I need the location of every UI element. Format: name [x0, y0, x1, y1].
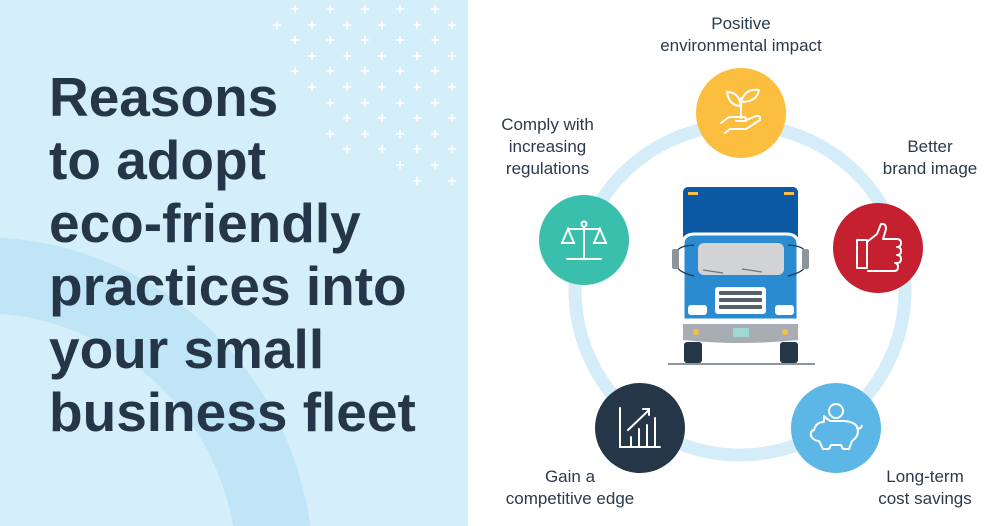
- label: cost savings: [878, 467, 972, 508]
- label: comply with regulations: Comply with: [501, 115, 594, 134]
- label: competitive edge: competitive edge: [506, 489, 634, 508]
- label: positive environmental impact: Positive: [711, 14, 771, 33]
- title: your small: [49, 318, 324, 380]
- label: comply with regulations: [501, 115, 594, 178]
- label: positive environmental impact: environmental impact: [660, 36, 822, 55]
- title: [49, 66, 416, 443]
- label: better brand image: [883, 137, 977, 178]
- label: positive environmental impact: [660, 14, 822, 55]
- label: competitive edge: [506, 467, 634, 508]
- title: business fleet: [49, 381, 416, 443]
- label: cost savings: Long-term: [886, 467, 964, 486]
- title: Reasons: [49, 66, 278, 128]
- truck: [668, 187, 815, 365]
- title: to adopt: [49, 129, 266, 191]
- icon: piggy bank (light blue): [791, 383, 881, 473]
- icon: plant in hand (yellow): [696, 68, 786, 158]
- title: eco-friendly: [49, 192, 361, 254]
- title: practices into: [49, 255, 407, 317]
- label: better brand image: brand image: [883, 159, 977, 178]
- icon: thumbs up (red): [833, 203, 923, 293]
- label: cost savings: cost savings: [878, 489, 972, 508]
- label: competitive edge: Gain a: [545, 467, 595, 486]
- label: comply with regulations: regulations: [506, 159, 589, 178]
- icon: chart (dark): [595, 383, 685, 473]
- label: comply with regulations: increasing: [509, 137, 586, 156]
- panel: left title area: [0, 0, 468, 526]
- icon: scales (teal): [539, 195, 629, 285]
- label: better brand image: Better: [907, 137, 953, 156]
